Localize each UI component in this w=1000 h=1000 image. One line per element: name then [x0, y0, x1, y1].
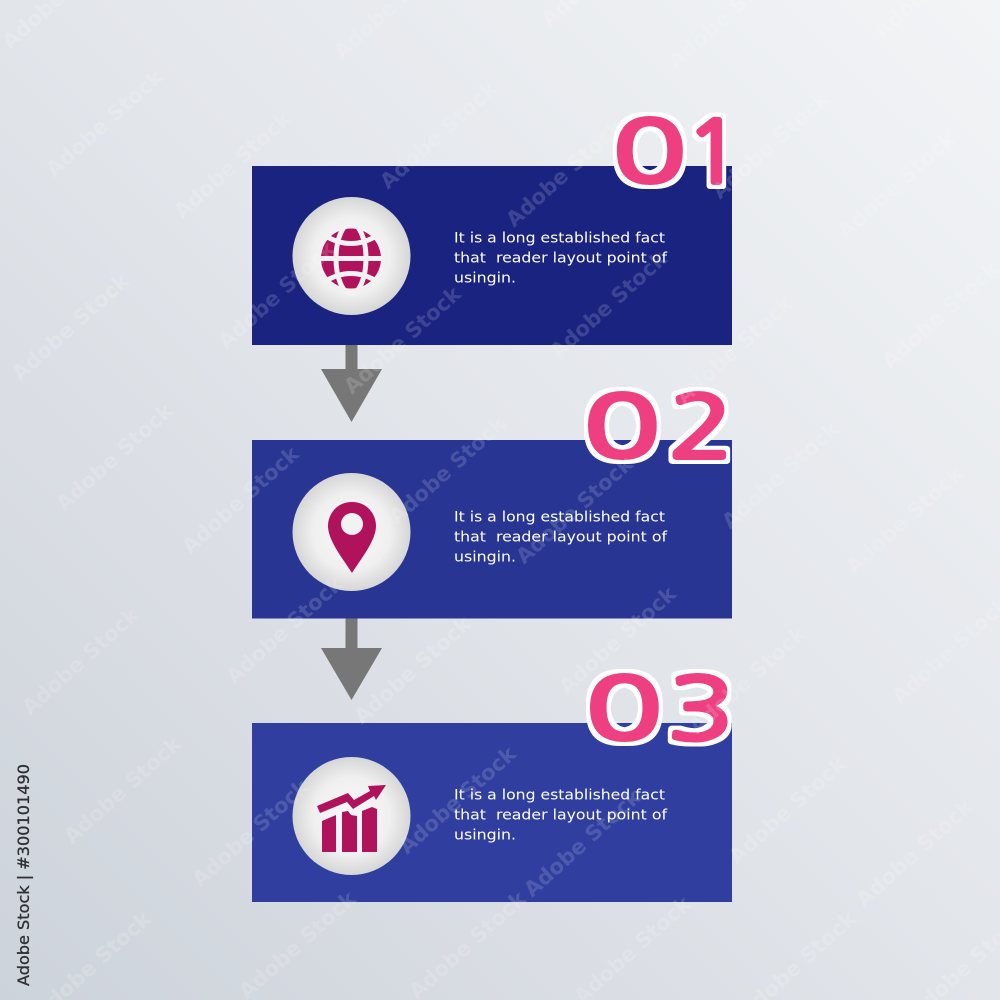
watermark: Adobe Stock	[717, 416, 844, 534]
panel 3 number	[586, 667, 734, 752]
panel 2 text: usingin.	[454, 550, 516, 566]
icon: location pin	[328, 502, 376, 573]
panel 2 icon disc	[292, 473, 410, 591]
panel 3 text	[454, 788, 668, 844]
panel 2 text: It is a long established fact	[454, 510, 665, 526]
panel 2 text: that reader layout point of	[454, 530, 668, 546]
panel 1 text: usingin.	[454, 270, 516, 286]
watermark: Adobe Stock	[169, 106, 296, 224]
watermark: Adobe Stock	[724, 751, 851, 869]
panel 1 text: that reader layout point of	[454, 250, 668, 266]
watermark: Adobe Stock	[877, 256, 1000, 374]
panel 3 text: usingin.	[454, 828, 516, 844]
panel 2 number: 2	[669, 385, 733, 470]
panel 2 background	[252, 440, 732, 618]
panel 1 icon disc	[292, 197, 410, 315]
panel 2	[252, 385, 733, 618]
watermark: Adobe Stock	[187, 774, 314, 892]
panel 3 text: It is a long established fact	[454, 788, 665, 804]
watermark: Adobe Stock	[339, 281, 466, 399]
watermark: Adobe Stock	[59, 731, 186, 849]
watermark: Adobe Stock	[349, 611, 476, 729]
watermark: Adobe Stock	[375, 76, 502, 194]
panel 3	[252, 667, 734, 902]
panel 2 text	[454, 510, 668, 566]
icon: growth chart	[317, 785, 386, 852]
panel 3 number: 0	[586, 667, 662, 752]
panel 1 background	[252, 166, 732, 345]
panel 3 icon disc	[292, 757, 410, 875]
watermark: Adobe Stock	[213, 236, 340, 354]
stock id label: Adobe Stock | #300101490	[14, 764, 33, 986]
watermark: Adobe Stock	[707, 86, 834, 204]
arrow 2	[321, 618, 382, 700]
panel 1 number: 0	[613, 110, 686, 195]
watermark: Adobe Stock	[841, 461, 968, 579]
watermark: Adobe Stock	[501, 114, 628, 232]
panel 1 number: 1	[686, 110, 741, 195]
watermark: Adobe Stock	[511, 451, 638, 569]
watermark: Adobe Stock	[41, 64, 168, 182]
watermark: Adobe Stock	[51, 398, 178, 516]
panel 1 number	[613, 110, 741, 195]
icon: globe	[318, 224, 384, 294]
panel 2 number	[584, 385, 733, 470]
arrow 1	[321, 345, 382, 422]
panel 2 number: 0	[584, 385, 660, 470]
watermark: Adobe Stock	[7, 268, 134, 386]
watermark: Adobe Stock	[833, 126, 960, 244]
panel 1	[252, 110, 741, 345]
watermark: Adobe Stock	[177, 441, 304, 559]
watermark: Adobe Stock	[554, 581, 681, 699]
panel 1 text	[454, 230, 668, 286]
watermark: Adobe Stock	[851, 794, 978, 912]
watermark: Adobe Stock	[519, 784, 646, 902]
panel 3 number: 3	[668, 667, 734, 752]
watermark: Adobe Stock	[394, 741, 521, 859]
panel 1 text: It is a long established fact	[454, 230, 665, 246]
watermark: Adobe Stock	[384, 411, 511, 529]
panel 3 text: that reader layout point of	[454, 808, 668, 824]
watermark: Adobe Stock	[684, 621, 811, 739]
panel 3 background	[252, 723, 732, 902]
watermark: Adobe Stock	[671, 291, 798, 409]
watermark: Adobe Stock	[221, 571, 348, 689]
watermark: Adobe Stock	[17, 602, 144, 720]
watermark: Adobe Stock	[545, 246, 672, 364]
